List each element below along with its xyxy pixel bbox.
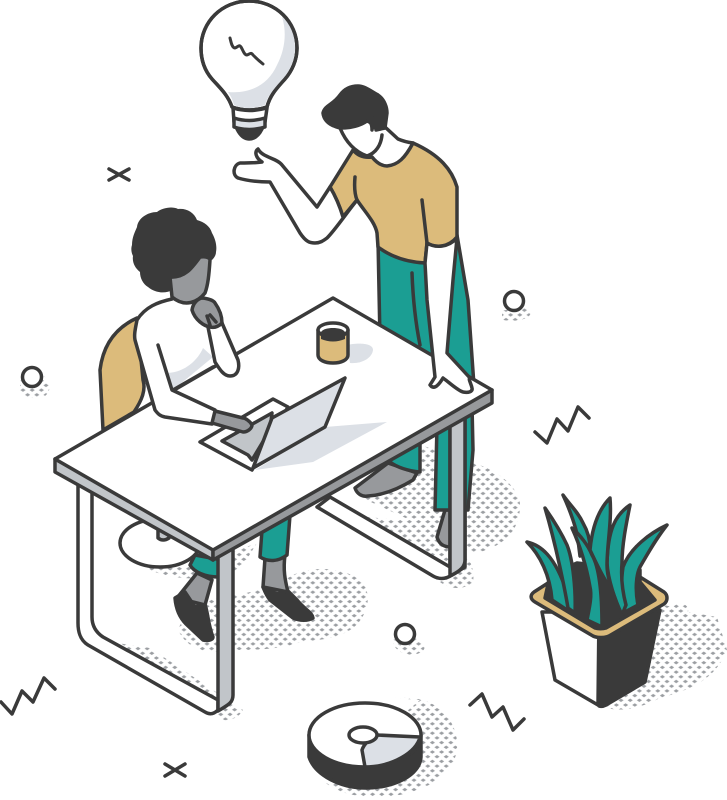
coffee cup [318,323,373,363]
man upper body [234,86,475,400]
decoration: cross bottom [165,764,185,776]
laptop base [200,399,288,470]
dotted floor shadows [20,307,727,797]
woman torso [135,297,215,424]
icon: light bulb [201,1,297,139]
table top [55,298,492,560]
man right arm on table [425,238,472,392]
front table frame [78,480,233,714]
decoration: cross top [109,169,129,180]
woman upper body [131,208,252,432]
man shirt fold [355,177,427,243]
man neck [353,127,413,162]
laptop keyboard [222,413,272,460]
back table frame [317,412,465,579]
plant leaves [563,495,590,556]
laptop [200,378,387,470]
woman torso outline [135,299,212,424]
plant pot [542,612,599,705]
laptop shadow [255,422,387,470]
decoration: circle top right [504,292,524,310]
woman face [170,257,210,303]
man hair [323,86,387,130]
woman hair [131,208,216,292]
vacuum top [309,703,421,767]
stool [120,519,200,567]
robot vacuum [309,703,421,788]
decoration: zigzag bottom [470,694,524,730]
woman forearm [208,323,239,376]
laptop screen [253,378,345,468]
man outstretched arm [234,149,357,243]
plant [527,495,667,706]
woman hand on laptop [212,411,252,432]
vacuum body [309,735,421,788]
decoration: circle centre [396,624,414,644]
man face outline [340,128,382,156]
plant soil [545,563,655,629]
vacuum button [349,727,377,743]
decoration: zigzag right [535,407,589,443]
decoration: zigzag left [1,678,55,714]
man trouser crease [412,273,420,345]
plant pot rim [531,577,667,638]
man neck outline [385,127,413,143]
woman hand on chin [192,298,222,327]
vacuum light wedge [362,735,420,767]
man lower legs [355,405,473,547]
decoration: circle left [22,368,42,386]
man face [340,125,385,156]
man trousers [378,235,475,400]
man shirt [330,143,457,263]
woman legs [175,515,313,640]
chair back [100,318,144,430]
